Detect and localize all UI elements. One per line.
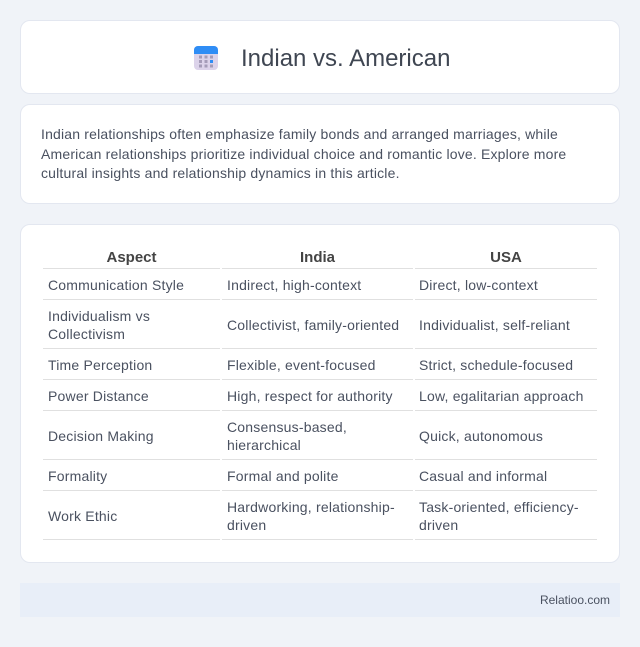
row: Work Ethic: Task-oriented, efficiency- (419, 499, 579, 515)
footer bar (20, 583, 620, 617)
row: Communication Style (48, 277, 538, 293)
row: Communication Style: Communication Style (48, 277, 184, 293)
row: Decision Making (48, 419, 543, 453)
row: Communication Style: Direct, low-context (419, 277, 538, 293)
row: Time Perception: Time Perception (48, 357, 152, 373)
row: Individualism vs Collectivism: Individualism vs (48, 308, 150, 324)
row: Work Ethic (48, 499, 579, 533)
row: Formality (48, 468, 547, 484)
row: Decision Making: hierarchical (227, 437, 301, 453)
row: Formality: Formality (48, 468, 107, 484)
row: Work Ethic: Hardworking, relationship- (227, 499, 395, 515)
row: Power Distance: Low, egalitarian approach (419, 388, 584, 404)
text block: introduction: American relationships prioritize individual choice and romantic love. Explore more (41, 146, 566, 162)
heading: Aspect: Aspect (106, 249, 157, 266)
table: column headings (106, 249, 522, 266)
row: Work Ethic: Work Ethic (48, 508, 117, 524)
icon: calendar (194, 46, 218, 70)
row: Time Perception: Flexible, event-focused (227, 357, 376, 373)
row: Communication Style: Indirect, high-context (227, 277, 361, 293)
row: Decision Making: Consensus-based, (227, 419, 347, 435)
row: Formality: Formal and polite (227, 468, 339, 484)
row: Decision Making: Decision Making (48, 428, 154, 444)
panel: title header (20, 20, 620, 94)
text block: introduction (41, 126, 566, 181)
title: Indian vs. American (241, 45, 450, 72)
row: Work Ethic: driven (227, 517, 266, 533)
row: Decision Making: Quick, autonomous (419, 428, 543, 444)
panel: introduction (20, 104, 620, 204)
row: Individualism vs Collectivism (48, 308, 570, 342)
row: Power Distance: Power Distance (48, 388, 149, 404)
panel: comparison table (20, 224, 620, 563)
row: Time Perception: Strict, schedule-focused (419, 357, 573, 373)
heading: India: India (300, 249, 335, 266)
text block: introduction: cultural insights and relationship dynamics in this article. (41, 165, 400, 181)
row: Work Ethic: driven (419, 517, 458, 533)
footer text: site name: Relatioo.com (540, 593, 610, 607)
row: Power Distance: High, respect for authority (227, 388, 393, 404)
row: Time Perception (48, 357, 573, 373)
row: Power Distance (48, 388, 584, 404)
row: Individualism vs Collectivism: Collectivist, family-oriented (227, 317, 399, 333)
text block: introduction: Indian relationships often emphasize family bonds and arranged marriages, while (41, 126, 558, 142)
row: Individualism vs Collectivism: Collectivism (48, 326, 125, 342)
heading: USA: USA (490, 249, 522, 266)
row: Formality: Casual and informal (419, 468, 547, 484)
row: Individualism vs Collectivism: Individualist, self-reliant (419, 317, 570, 333)
